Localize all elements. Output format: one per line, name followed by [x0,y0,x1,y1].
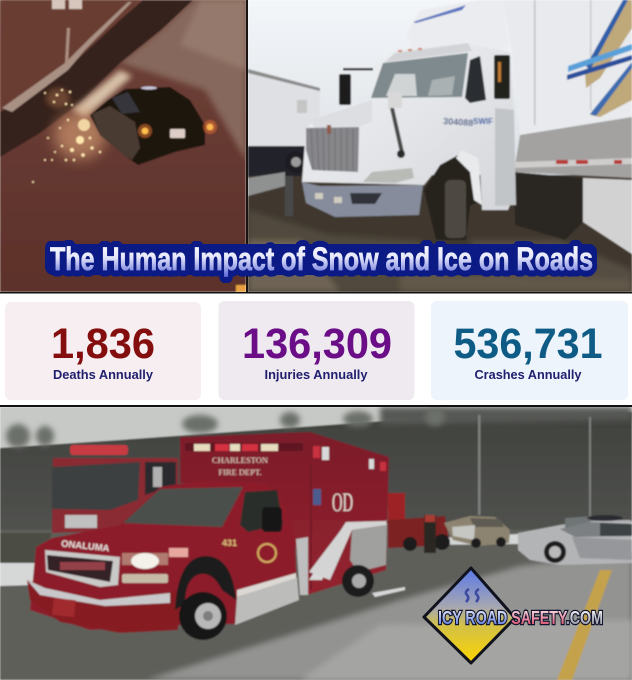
number: deaths: 1,836 [51,320,155,368]
road [0,530,632,680]
trailer [502,0,632,254]
tow truck [388,493,450,553]
label: deaths: Deaths Annually [53,368,153,382]
stat card: injuries [218,301,414,400]
label: crashes: Crashes Annually [474,368,582,382]
logo: Icy Road Safety [424,568,603,663]
front bumper [27,580,180,633]
light streak on barrier [2,2,132,112]
car [90,86,217,165]
border above lower photo [0,405,632,407]
hillside [0,412,632,540]
logo text: ICY ROAD SAFETY.COM [438,608,603,628]
logo diamond [424,568,515,663]
border under top photos [0,292,632,294]
icon: road curves [466,589,479,602]
background trailer [248,69,320,216]
sign post [52,0,82,64]
road centre line [557,570,612,680]
cab fairing [412,0,503,24]
photo: night crash with sparks [0,0,246,292]
cab body [302,43,516,210]
ambulance rear wheel [342,565,374,597]
ambulance cab: 431 [222,538,237,548]
photo: jackknifed white truck [248,0,632,292]
cab body: 304088 [443,116,474,128]
mirrors [297,55,510,158]
grille [306,125,359,172]
stat card: deaths [5,302,201,400]
divider [246,0,248,292]
fire engine [52,445,178,533]
number: crashes: 536,731 [454,320,602,368]
stat card: crashes [431,301,628,400]
label: injuries: Injuries Annually [264,368,368,382]
ambulance box [180,432,389,595]
trailer logo stripes [585,0,632,88]
wheel and fender [424,150,482,240]
sparks glow [54,111,106,159]
ambulance box: FIRE DEPT. [218,467,262,477]
ambulance box: OD [332,488,353,517]
damaged tan sedan [444,516,510,548]
bumper [302,182,423,217]
silver car [518,515,632,565]
barrier band [0,0,193,157]
ambulance cab [27,481,299,640]
light bar [185,443,303,451]
white stripe [309,520,387,580]
ambulance lettering: CHARLESTON [212,455,268,465]
grille and headlights [45,550,120,587]
ambulance cab: ONALUMA [61,539,110,555]
photo: fire department ambulance and crash scene [0,407,632,680]
cab body: SWIF [473,117,493,126]
front wheel [175,556,236,610]
number: injuries: 136,309 [242,320,392,368]
headlight [363,168,414,183]
